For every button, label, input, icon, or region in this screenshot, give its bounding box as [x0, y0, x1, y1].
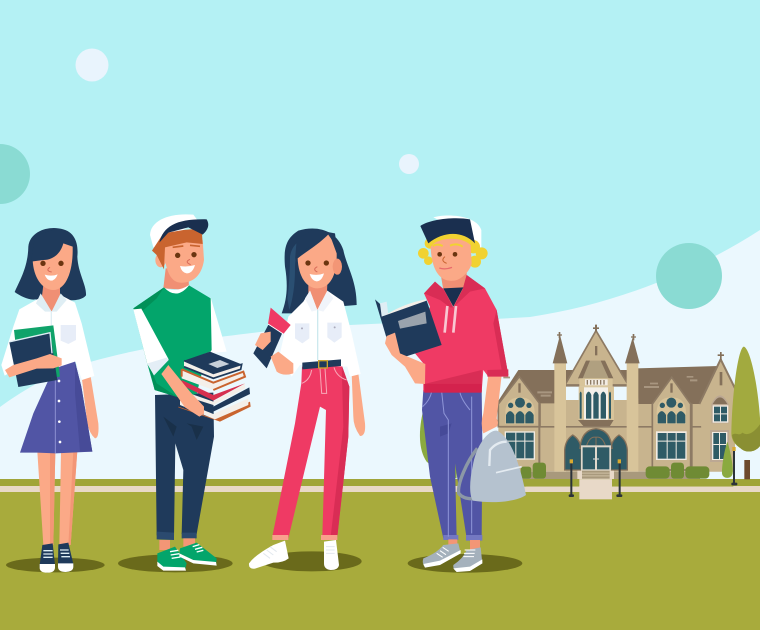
hair back	[282, 228, 357, 313]
face	[431, 230, 471, 281]
hoodie inner neck	[443, 287, 463, 307]
notebook	[14, 325, 60, 383]
jeans	[422, 390, 482, 538]
neck	[163, 268, 189, 290]
left gable	[498, 377, 540, 427]
central bay roof	[578, 361, 613, 378]
ground shadow	[408, 554, 522, 573]
hoodie	[415, 275, 508, 392]
cap peak	[420, 218, 475, 243]
bushes	[521, 463, 709, 479]
shoes	[423, 543, 482, 572]
right sleeve	[206, 297, 227, 353]
lamp posts	[569, 447, 737, 497]
roof tiles	[503, 376, 697, 397]
shirt	[1, 295, 94, 380]
facial features	[305, 260, 311, 266]
facial features	[175, 253, 180, 258]
small cone tree	[722, 442, 733, 478]
right gable	[700, 359, 735, 472]
vest	[133, 285, 212, 397]
collar	[163, 285, 189, 295]
trousers	[155, 393, 214, 537]
face	[33, 243, 73, 290]
right-hand students	[249, 215, 526, 573]
cap back	[150, 214, 197, 247]
walls	[498, 400, 735, 472]
left sleeve	[133, 309, 169, 375]
shirt	[280, 291, 361, 377]
trousers	[272, 365, 349, 538]
entrance steps and walk	[577, 471, 614, 479]
neck	[42, 285, 60, 312]
ankles	[448, 539, 480, 550]
forearm and hand	[161, 365, 204, 417]
middle right gable	[652, 377, 691, 470]
shoes	[157, 543, 217, 570]
face	[298, 233, 337, 288]
legs	[37, 451, 77, 545]
hair fringe	[295, 229, 337, 260]
book	[253, 308, 291, 368]
ground shadow	[262, 551, 362, 571]
neck	[308, 283, 327, 310]
cap peak	[159, 219, 208, 243]
bangs	[31, 229, 63, 262]
face	[163, 240, 204, 283]
towers	[554, 362, 566, 472]
open book	[375, 299, 442, 358]
curly hair	[418, 228, 488, 268]
facial features	[40, 261, 46, 266]
decorative circles	[0, 48, 722, 309]
forearm	[5, 354, 62, 377]
hair	[152, 228, 203, 269]
ground shadow	[6, 558, 105, 572]
shoes	[249, 540, 339, 570]
backpack	[459, 431, 526, 502]
campus building	[497, 325, 760, 499]
facial features	[433, 244, 463, 247]
ankles	[159, 538, 195, 550]
ground shadow	[118, 554, 233, 572]
left-hand students	[1, 214, 251, 573]
right arm	[482, 375, 502, 433]
hair back	[15, 228, 86, 300]
hand and forearm	[255, 332, 293, 375]
neck	[440, 270, 467, 307]
shirt pockets	[295, 323, 342, 343]
ground floor windows	[505, 395, 729, 462]
entrance	[565, 429, 627, 471]
student 2: boy carrying books	[118, 214, 251, 572]
skirt	[20, 362, 92, 453]
bush behind student 4	[420, 410, 457, 478]
central bay window	[579, 387, 614, 420]
tall tree	[731, 347, 760, 479]
shoes	[40, 543, 73, 573]
lawn and path	[0, 479, 760, 630]
hand and forearm	[385, 333, 425, 384]
light hill	[0, 230, 760, 480]
roofs	[497, 366, 718, 404]
student 3: girl with book	[249, 228, 365, 571]
right arm	[82, 377, 99, 438]
gable arched windows	[505, 397, 535, 424]
central gable	[565, 331, 628, 385]
left arm	[352, 373, 365, 436]
book stack	[177, 352, 251, 422]
garden strip	[523, 479, 733, 487]
cap back	[433, 215, 481, 248]
floor trim	[500, 385, 735, 428]
student 1: girl with notebooks	[1, 228, 105, 573]
shirt pocket	[61, 325, 76, 344]
belt	[302, 359, 341, 369]
student 4: boy reading	[375, 215, 526, 573]
